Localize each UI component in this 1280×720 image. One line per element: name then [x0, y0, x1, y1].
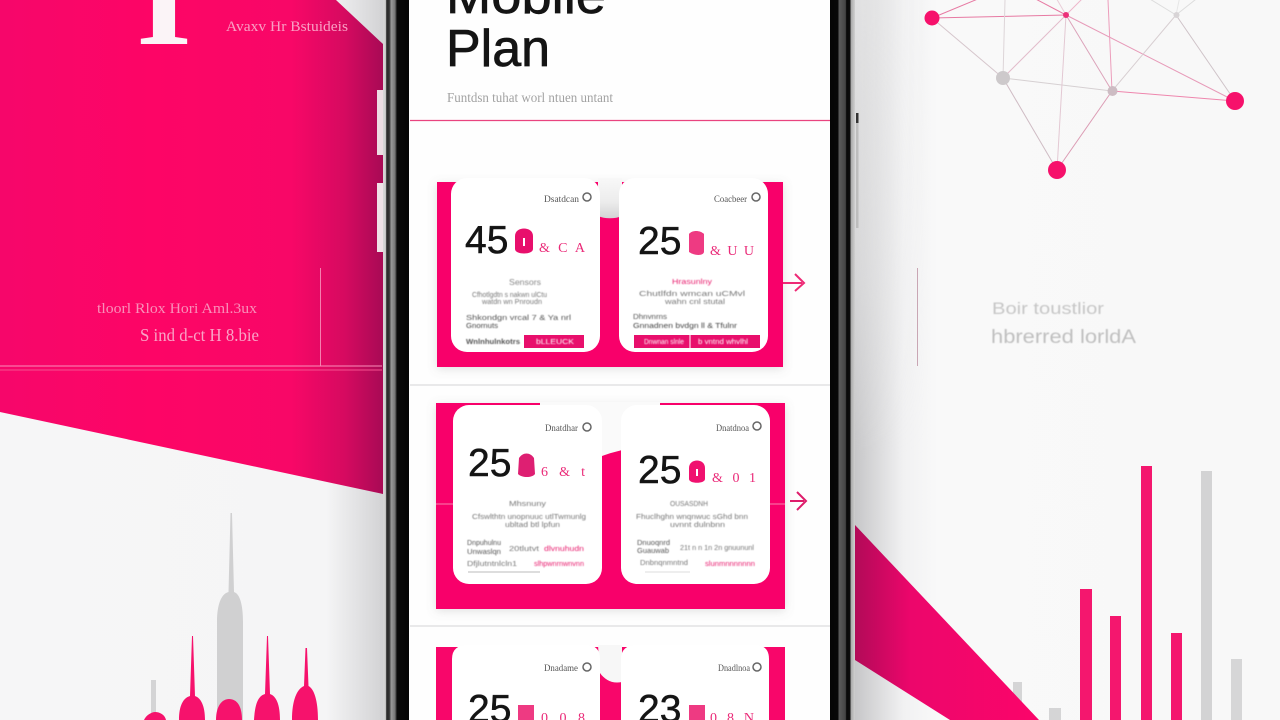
card: 45 plan: 45	[465, 219, 508, 262]
pink tower 1	[179, 636, 205, 720]
heading rule	[410, 120, 830, 122]
grey tower	[217, 513, 243, 720]
card: 25 plan right: Fhuclhghn wnqnwuc sGhd bnn	[636, 514, 748, 521]
card: 25 plan left: slhpwnrnwnvnn	[534, 561, 584, 568]
right divider lines	[855, 268, 1235, 366]
pink tower centre	[216, 699, 242, 720]
pink tower 3	[292, 648, 318, 720]
card: 25 plan right: 25	[638, 449, 681, 492]
card: 25 plan right	[621, 405, 770, 584]
right text block	[991, 299, 1136, 348]
card: 25 plan left: 20tlutvt	[509, 546, 539, 553]
background: right side	[855, 0, 900, 720]
card: 25 plan right: 21t n n 1n 2n gnuununl	[680, 545, 754, 552]
card: 45 plan: Sensors	[509, 278, 541, 287]
card: 23 plan lower right: Dnadlnoa	[718, 663, 750, 673]
card: 23 plan lower right	[621, 645, 769, 720]
card: 45 plan: Gnornuts	[466, 323, 499, 330]
phone side button right	[856, 113, 858, 228]
right text block: Boir toustlior	[992, 299, 1104, 318]
card: 45 plan: Cfhotlgdtn s nakwn ulCtu	[472, 292, 547, 299]
card: 25 plan left: 25	[468, 442, 511, 485]
card: 25 plan left: Dnatdhar	[545, 423, 578, 433]
card: 25 plan: Chutlfdn wmcan uCMvl	[639, 291, 746, 298]
card: 25 plan lower left: Dnadame	[544, 663, 578, 673]
card: 25 plan right: slunmnnnnnnn	[705, 561, 755, 568]
card: 45 plan: & C A	[539, 241, 586, 256]
card: 25 plan right: OUSASDNH	[670, 501, 708, 508]
card: 25 plan left	[453, 405, 602, 584]
pink tower small	[144, 712, 166, 720]
card: 45 plan: watdn wn Pnroudn	[481, 299, 542, 306]
plan row 1	[437, 178, 804, 367]
right pink diagonal	[855, 525, 1039, 720]
card: 25 plan right: Guauwab	[637, 548, 669, 555]
row 2 top cutout	[540, 402, 660, 456]
card: 25 plan right: Dnuoqnrd	[637, 540, 670, 547]
heading: Plan	[446, 20, 550, 78]
row 1 pink panel	[437, 182, 783, 367]
card: 45 plan: bLLEUCK	[536, 339, 574, 346]
card: 25 plan left: Cfswlthtn unopnuuc utlTwmunlg	[472, 514, 586, 521]
card: 25 plan right: Dnbnqnmntnd	[640, 560, 688, 567]
row separators	[410, 384, 830, 627]
phone screen	[409, 0, 830, 720]
card: 25 plan: Coacbeer	[714, 194, 747, 204]
card: 45 plan: Dsatdcan	[544, 194, 580, 204]
bar chart	[1013, 466, 1242, 720]
card: 45 plan: Shkondgn vrcal 7 & Ya nrl	[466, 315, 572, 322]
card: 25 plan lower left	[452, 645, 600, 720]
card: 25 plan: Dnwnan slnle	[644, 339, 684, 346]
pink tower 2	[254, 636, 280, 720]
card: 25 plan: b vntnd whvlhl	[698, 339, 749, 346]
right text block: hbrerred lorldA	[991, 327, 1136, 348]
row 1 notch	[598, 178, 622, 218]
network links	[932, 0, 1235, 170]
left text block	[97, 301, 259, 345]
card: 25 plan: Dhnvnrns	[633, 314, 668, 321]
network diagram	[924, 0, 1244, 179]
card: 25 plan: wahn cnl stutal	[664, 299, 726, 306]
phone side buttons left	[377, 90, 383, 252]
heading	[446, 0, 606, 78]
card: 25 plan left: Mhsnuny	[509, 501, 547, 508]
plan row 2	[436, 402, 806, 609]
card: 25 plan left: 6 & t	[541, 465, 585, 480]
network nodes	[924, 10, 1244, 179]
card: 25 plan	[619, 178, 768, 352]
card: 25 plan right: uvnnt dulnbnn	[670, 522, 725, 529]
left text block: tloorl Rlox Hori Aml.3ux	[97, 301, 258, 317]
panel: left pink shape	[0, 0, 383, 494]
arrow row 2	[790, 492, 806, 510]
card: 25 plan left: ubltad btl lpfun	[505, 522, 560, 529]
background: left side	[0, 0, 384, 720]
row 2 pink panel	[436, 403, 785, 609]
subtitle: Funtdsn tuhat worl ntuen untant	[447, 91, 613, 106]
card: 25 plan: & U U	[710, 244, 754, 259]
phone frame	[383, 0, 855, 720]
row 3 notch	[598, 645, 622, 683]
arrow row 1	[783, 274, 804, 291]
card: 25 plan left: dlvnuhudn	[544, 546, 584, 553]
top left caption: Avaxv Hr Bstuideis	[226, 19, 348, 35]
row 2 mid lines	[436, 503, 785, 505]
card: 45 plan: Wnlnhulnkotrs	[466, 339, 520, 346]
card: 25 plan right: & 0 1	[712, 471, 756, 486]
row 3 pink panel	[436, 647, 785, 720]
card: 25 plan: Hrasunlny	[672, 279, 713, 286]
left divider lines	[0, 268, 382, 370]
plan row 3	[436, 645, 785, 720]
left text block: S ind d-ct H 8.bie	[140, 325, 259, 345]
card: 45 plan	[451, 178, 600, 352]
skyline illustration	[144, 513, 318, 720]
card: 25 plan: 25	[638, 220, 681, 263]
card: 25 plan left: Dnpuhulnu	[467, 540, 501, 547]
card: 25 plan right: Dnatdnoa	[716, 423, 749, 433]
card: 25 plan left: Unwaslqn	[467, 549, 501, 556]
card: 25 plan left: Dfjlutntnlcln1	[467, 561, 517, 568]
card: 25 plan: Gnnadnen bvdgn ll & Tfulnr	[633, 323, 738, 330]
grey short spire	[151, 680, 156, 720]
